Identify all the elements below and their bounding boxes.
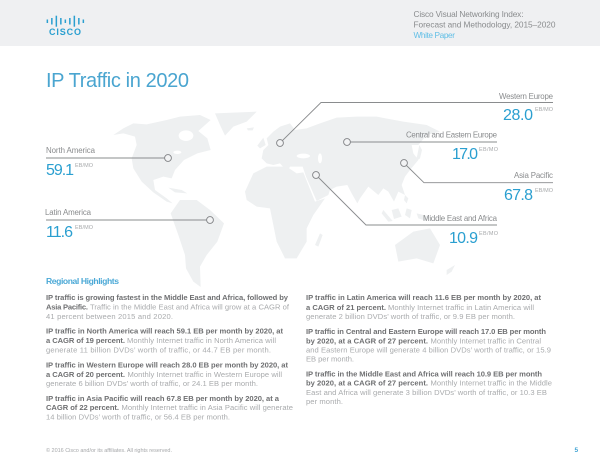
- map: Greenland: [215, 112, 257, 136]
- text: Middle East and Africa paragraph: by 2020, at a CAGR of 27 percent.: [306, 378, 428, 388]
- text: Western Europe paragraph: [46, 360, 288, 388]
- text: Asia Pacific paragraph: CAGR of 22 percent.: [46, 403, 119, 412]
- heading: Regional Highlights: Regional Highlights: [46, 276, 119, 286]
- text: Middle East and Africa paragraph: per month.: [306, 397, 343, 406]
- map: South America: [171, 200, 224, 287]
- text: North America paragraph: generate 11 billion DVDs’ worth of traffic, or 44.7 EB per month.: [46, 346, 271, 354]
- text: Asia Pacific paragraph: 14 billion DVDs’ worth of traffic, or 56.4 EB per month.: [46, 412, 230, 422]
- callout: Middle East and Africa: 10.9: [449, 230, 478, 247]
- title: IP Traffic in 2020: [46, 70, 189, 92]
- text: growth paragraph: [46, 293, 290, 321]
- text: Central and Eastern Europe paragraph: and Eastern Europe will generate 4 billion DVDs’ worth of traffic, or 15.9: [306, 346, 551, 354]
- text: Western Europe paragraph: generate 6 billion DVDs’ worth of traffic, or 24.1 EB per month.: [46, 379, 258, 388]
- map: Japan: [415, 145, 422, 162]
- text: North America paragraph: [46, 326, 283, 354]
- text: North America paragraph: a CAGR of 19 percent.: [46, 336, 125, 345]
- page number: 5: [574, 447, 578, 454]
- callout: Asia Pacific: EB/MO: [535, 188, 554, 194]
- callout: North America: [46, 146, 171, 179]
- text: Central and Eastern Europe paragraph: by 2020, at a CAGR of 27 percent.: [306, 336, 428, 346]
- text: Middle East and Africa paragraph: Monthly Internet traffic in the Middle: [430, 378, 552, 388]
- text: Latin America paragraph: [306, 293, 541, 321]
- callout: Asia Pacific: Asia Pacific: [514, 171, 553, 180]
- text: Central and Eastern Europe paragraph: [306, 327, 551, 364]
- text: Latin America paragraph: a CAGR of 21 percent.: [306, 303, 386, 312]
- map: Africa: [245, 167, 325, 258]
- callout: Latin America: EB/MO: [75, 225, 94, 231]
- text: North America paragraph: Monthly Internet traffic in North America will: [127, 336, 276, 345]
- map: Iceland and Britain: [247, 127, 266, 148]
- callout: Central and Eastern Europe: EB/MO: [479, 147, 499, 153]
- callout: Western Europe: [277, 92, 554, 146]
- text: North America paragraph: IP traffic in North America will reach 59.1 EB per month by 2020, at: [46, 326, 283, 336]
- text: Western Europe paragraph: Monthly Internet traffic in Western Europe will: [128, 370, 282, 379]
- header document title: White Paper: [414, 30, 455, 40]
- callout: Western Europe: EB/MO: [535, 107, 554, 113]
- callout: Middle East and Africa: EB/MO: [479, 231, 499, 237]
- callout: Latin America: Latin America: [45, 208, 92, 217]
- text: Latin America paragraph: IP traffic in Latin America will reach 11.6 EB per month by 2020, at: [306, 293, 541, 302]
- callout: Middle East and Africa: [313, 172, 499, 247]
- map: Eurasia: [262, 117, 440, 203]
- header document title: [414, 9, 556, 40]
- callout: Central and Eastern Europe: [344, 130, 499, 163]
- text: Middle East and Africa paragraph: East and Africa will generate 3 billion DVDs’ worth of traffic, or 10.3 EB: [306, 388, 547, 397]
- text: Central and Eastern Europe paragraph: IP traffic in Central and Eastern Europe will reach 17.0 EB per month: [306, 327, 546, 336]
- map: Southeast Asian islands: [382, 195, 430, 222]
- callout: Asia Pacific: 67.8: [504, 187, 533, 204]
- callout: Middle East and Africa: Middle East and Africa: [423, 214, 498, 223]
- text: Middle East and Africa paragraph: IP traffic in the Middle East and Africa will reach 10.9 EB per month: [306, 370, 542, 378]
- text: Latin America paragraph: Monthly Internet traffic in Latin America will: [388, 303, 534, 312]
- text: Middle East and Africa paragraph: [306, 370, 552, 406]
- callout: Asia Pacific: [401, 160, 554, 204]
- map: Australia: [395, 228, 440, 263]
- header band: [0, 0, 600, 46]
- callout: Western Europe: 28.0: [503, 107, 533, 124]
- text: growth paragraph: 41 percent between 2015 and 2020.: [46, 312, 173, 321]
- text: growth paragraph: Traffic in the Middle East and Africa will grow at a CAGR of: [90, 302, 290, 312]
- callout: Latin America: [45, 208, 213, 241]
- text: Latin America paragraph: generate 2 billion DVDs’ worth of traffic, or 9.9 EB per month.: [306, 312, 515, 321]
- text: growth paragraph: IP traffic is growing fastest in the Middle East and Africa, followed by: [46, 293, 289, 302]
- text: Asia Pacific paragraph: [46, 394, 293, 422]
- text: Central and Eastern Europe paragraph: EB per month.: [306, 354, 354, 364]
- map: Hudson Bay and Great Lakes: [173, 130, 193, 154]
- callout: Latin America: 11.6: [46, 224, 73, 241]
- callout: Western Europe: Western Europe: [499, 92, 554, 101]
- text: Asia Pacific paragraph: IP traffic in Asia Pacific will reach 67.8 EB per month by 2020, at a: [46, 394, 280, 403]
- map: inland seas: [297, 153, 322, 163]
- text: growth paragraph: Asia Pacific.: [46, 302, 88, 312]
- callout: North America: North America: [46, 146, 96, 155]
- text: Western Europe paragraph: a CAGR of 20 percent.: [46, 370, 125, 379]
- text: Asia Pacific paragraph: Monthly Internet traffic in Asia Pacific will generate: [122, 403, 293, 412]
- callout: Central and Eastern Europe: Central and Eastern Europe: [406, 130, 498, 140]
- world map: [113, 112, 455, 287]
- callout: Central and Eastern Europe: 17.0: [452, 146, 478, 163]
- map: New Zealand: [447, 265, 455, 275]
- map: Cuba: [168, 188, 187, 193]
- map: Madagascar: [315, 233, 323, 247]
- footer copyright: © 2016 Cisco and/or its affiliates. All rights reserved.: [46, 447, 172, 454]
- header document title: Forecast and Methodology, 2015–2020: [414, 20, 556, 30]
- icon: Cisco logo: CISCO: [49, 27, 81, 37]
- callout: North America: 59.1: [46, 162, 74, 179]
- icon: Cisco logo: [47, 16, 84, 37]
- callout: North America: EB/MO: [75, 163, 94, 169]
- text: Western Europe paragraph: IP traffic in Western Europe will reach 28.0 EB per month by 2020, at: [46, 360, 288, 370]
- header document title: Cisco Visual Networking Index:: [414, 9, 524, 19]
- text: Central and Eastern Europe paragraph: Monthly Internet traffic in Central: [430, 336, 541, 346]
- map: North America: [113, 115, 211, 203]
